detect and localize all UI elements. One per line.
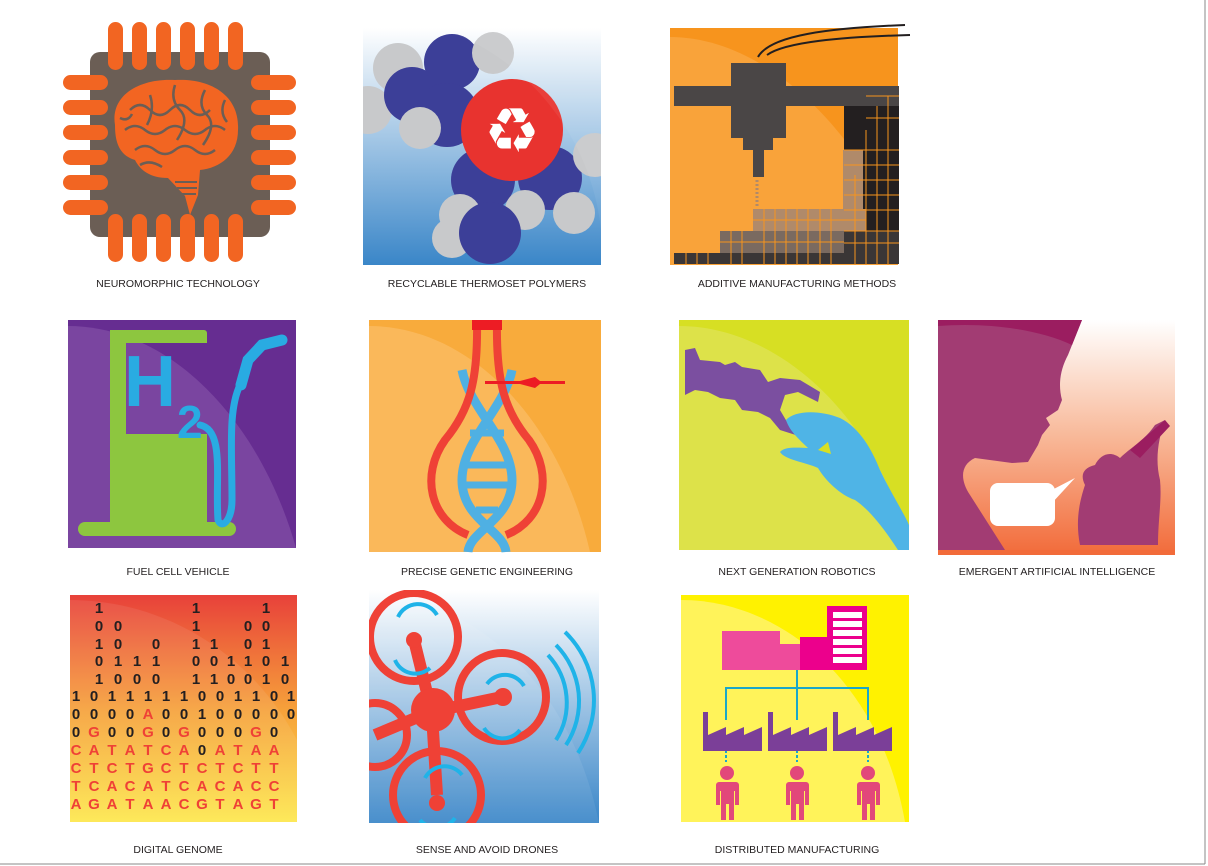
text grid: binary and DNA letters: 1 [133, 653, 141, 670]
icon: brain [114, 80, 238, 215]
label: precise genetic engineering: PRECISE GENETIC ENGINEERING [401, 566, 573, 578]
text grid: binary and DNA letters: 0 [244, 618, 252, 635]
panel: digital genome: G [250, 796, 262, 813]
text grid: binary and DNA letters: 1 [95, 636, 103, 653]
text grid: binary and DNA letters: 1 [144, 688, 152, 705]
text grid: binary and DNA letters: 0 [126, 706, 134, 723]
text grid: binary and DNA letters: G [142, 724, 154, 741]
text grid: binary and DNA letters: G [88, 724, 100, 741]
text grid: binary and DNA letters: 0 [244, 636, 252, 653]
text grid: binary and DNA letters: 1 [152, 653, 160, 670]
text grid: binary and DNA letters: 0 [133, 671, 141, 688]
text grid: binary and DNA letters: 0 [216, 688, 224, 705]
text grid: binary and DNA letters: 0 [216, 724, 224, 741]
text grid: binary and DNA letters: 0 [234, 706, 242, 723]
text grid: binary and DNA letters: 0 [287, 706, 295, 723]
text grid: binary and DNA letters: 1 [262, 636, 270, 653]
icon: recycle symbol [461, 79, 563, 181]
text grid: binary and DNA letters: 1 [114, 653, 122, 670]
text grid: binary and DNA letters: 0 [90, 688, 98, 705]
text grid: binary and DNA letters: 1 [95, 671, 103, 688]
label: neuromorphic technology: NEUROMORPHIC TECHNOLOGY [96, 278, 260, 290]
icon: headquarters [722, 606, 867, 670]
icon: red vessel [431, 322, 543, 535]
text grid: binary and DNA letters: 1 [262, 600, 270, 617]
text grid: binary and DNA letters: 1 [210, 671, 218, 688]
text grid: binary and DNA letters: 1 [192, 671, 200, 688]
panel: digital genome: 0 [198, 742, 206, 759]
text grid: binary and DNA letters: 1 [227, 653, 235, 670]
panel: digital genome: T [143, 742, 153, 759]
panel: digital genome: C [233, 760, 244, 777]
text grid: binary and DNA letters: 0 [162, 724, 170, 741]
text grid: binary and DNA letters: 0 [162, 706, 170, 723]
text grid: binary and DNA letters: G [178, 724, 190, 741]
text grid: binary and DNA letters: 1 [210, 636, 218, 653]
panel: distributed manufacturing [681, 595, 909, 822]
panel: digital genome: A [197, 778, 208, 795]
text grid: binary and DNA letters: 1 [287, 688, 295, 705]
icon: factories [703, 712, 892, 751]
panel: digital genome: A [179, 742, 190, 759]
panel: digital genome: T [125, 760, 135, 777]
icon: needle [485, 377, 565, 388]
panel: digital genome: A [233, 796, 244, 813]
panel: digital genome: C [125, 778, 136, 795]
text grid: binary and DNA letters: 0 [95, 653, 103, 670]
icon: DNA [462, 370, 512, 552]
label: distributed manufacturing: DISTRIBUTED MANUFACTURING [715, 844, 879, 856]
icon: recycle symbol: ♻ [484, 94, 540, 167]
text grid: binary and DNA letters: G [250, 724, 262, 741]
text grid: binary and DNA letters: 1 [262, 671, 270, 688]
text grid: binary and DNA letters: 1 [234, 688, 242, 705]
text grid: binary and DNA letters: 0 [95, 618, 103, 635]
icon: people [712, 766, 880, 820]
text grid: binary and DNA letters: A [143, 706, 154, 723]
icon: human hand [780, 412, 909, 550]
text grid: binary and DNA letters: 1 [95, 600, 103, 617]
text grid: binary and DNA letters: 0 [262, 618, 270, 635]
text grid: binary and DNA letters: 1 [72, 688, 80, 705]
text grid: binary and DNA letters: 0 [216, 706, 224, 723]
panel: digital genome: C [89, 778, 100, 795]
text grid: binary and DNA letters: 0 [90, 706, 98, 723]
text grid: binary and DNA letters: 0 [281, 671, 289, 688]
text grid: binary and DNA letters: 0 [108, 706, 116, 723]
icon: connection lines [726, 670, 868, 720]
panel: digital genome: A [71, 796, 82, 813]
label: recyclable thermoset polymers: RECYCLABLE THERMOSET POLYMERS [388, 278, 586, 290]
icon: H2: H [124, 342, 176, 422]
text grid: binary and DNA letters: 1 [281, 653, 289, 670]
panel: digital genome: C [71, 742, 82, 759]
text grid: binary and DNA letters: 0 [180, 706, 188, 723]
panel: digital genome: A [125, 742, 136, 759]
panel: digital genome: T [269, 760, 279, 777]
panel: digital genome: C [251, 778, 262, 795]
label: digital genome: DIGITAL GENOME [133, 844, 223, 856]
panel: digital genome: T [233, 742, 243, 759]
panel: precise genetic engineering [369, 320, 601, 552]
panel: digital genome: G [88, 796, 100, 813]
text grid: binary and DNA letters: 0 [72, 724, 80, 741]
text grid: binary and DNA letters: 0 [227, 671, 235, 688]
icon: robot arm [685, 348, 820, 437]
icon: chip body [90, 52, 270, 237]
panel: additive manufacturing methods [670, 25, 910, 265]
text grid: binary and DNA letters: 1 [126, 688, 134, 705]
panel: digital genome: A [161, 796, 172, 813]
text grid: binary and DNA letters: 0 [114, 618, 122, 635]
panel: digital genome: T [71, 778, 81, 795]
text grid: binary and DNA letters: 0 [270, 688, 278, 705]
panel: emergent artificial intelligence [938, 320, 1175, 555]
panel: digital genome: T [251, 760, 261, 777]
text grid: binary and DNA letters [72, 600, 295, 741]
panel: digital genome: C [269, 778, 280, 795]
text grid: binary and DNA letters: 1 [198, 706, 206, 723]
panel: digital genome: C [197, 760, 208, 777]
panel: recyclable thermoset polymers [363, 32, 601, 265]
text grid: binary and DNA letters: 0 [252, 706, 260, 723]
panel: digital genome: C [215, 778, 226, 795]
text grid: binary and DNA letters: 1 [244, 653, 252, 670]
panel: digital genome: T [215, 796, 225, 813]
panel: digital genome: C [179, 778, 190, 795]
text grid: binary and DNA letters: 0 [210, 653, 218, 670]
text grid: binary and DNA letters: 1 [108, 688, 116, 705]
icon: speech bubble [990, 478, 1075, 526]
text grid: binary and DNA letters: 1 [180, 688, 188, 705]
panel: digital genome: T [161, 778, 171, 795]
text grid: binary and DNA letters: 0 [270, 706, 278, 723]
text grid: binary and DNA letters: 0 [152, 636, 160, 653]
text grid: binary and DNA letters: 0 [114, 636, 122, 653]
panel: next generation robotics [679, 320, 909, 550]
text grid: binary and DNA letters: 0 [114, 671, 122, 688]
panel: digital genome [70, 595, 297, 822]
text grid: binary and DNA letters: 0 [72, 706, 80, 723]
panel: digital genome: C [71, 760, 82, 777]
panel: digital genome: A [215, 742, 226, 759]
icon: hand with pen [1078, 420, 1165, 545]
text grid: binary and DNA letters: 1 [252, 688, 260, 705]
panel: fuel cell vehicle: 2 [177, 396, 203, 448]
panel: digital genome: A [107, 796, 118, 813]
panel: digital genome: C [161, 760, 172, 777]
panel: digital genome: A [143, 796, 154, 813]
text grid: binary and DNA letters: 0 [262, 653, 270, 670]
icon: drone [369, 590, 550, 823]
text grid: binary and DNA letters: 0 [198, 724, 206, 741]
text grid: binary and DNA letters: 0 [152, 671, 160, 688]
text grid: binary and DNA letters: 0 [198, 688, 206, 705]
icon: propeller and signal arcs [395, 604, 594, 828]
panel: digital genome: T [215, 760, 225, 777]
panel: digital genome: T [269, 796, 279, 813]
text grid: binary and DNA letters: 0 [244, 671, 252, 688]
panel: neuromorphic technology [63, 22, 296, 262]
label: next generation robotics: NEXT GENERATION ROBOTICS [718, 566, 876, 578]
panel: digital genome: T [89, 760, 99, 777]
panel: digital genome: A [269, 742, 280, 759]
panel: digital genome: T [125, 796, 135, 813]
text grid: binary and DNA letters: 0 [192, 653, 200, 670]
panel: digital genome: A [107, 778, 118, 795]
panel: digital genome: T [107, 742, 117, 759]
panel: digital genome: C [179, 796, 190, 813]
panel: digital genome: A [143, 778, 154, 795]
label: emergent artificial intelligence: EMERGENT ARTIFICIAL INTELLIGENCE [959, 566, 1155, 578]
text grid: binary and DNA letters: 1 [192, 618, 200, 635]
panel: digital genome: G [142, 760, 154, 777]
icon: molecules [363, 32, 601, 264]
panel: digital genome: A [233, 778, 244, 795]
text grid: binary and DNA letters: 1 [192, 636, 200, 653]
icon: printer [674, 25, 910, 265]
icon: face silhouette [938, 320, 1082, 550]
label: fuel cell vehicle: FUEL CELL VEHICLE [126, 566, 230, 578]
label: additive manufacturing methods: ADDITIVE MANUFACTURING METHODS [698, 278, 896, 290]
panel: fuel cell vehicle [68, 320, 296, 548]
text grid: binary and DNA letters: 0 [270, 724, 278, 741]
panel: digital genome: T [179, 760, 189, 777]
panel: digital genome: G [196, 796, 208, 813]
panel: digital genome: C [107, 760, 118, 777]
icon: hose nozzle [200, 340, 282, 524]
label: sense and avoid drones: SENSE AND AVOID DRONES [416, 844, 558, 856]
panel: digital genome: A [251, 742, 262, 759]
panel: sense and avoid drones [369, 590, 599, 823]
text grid: binary and DNA letters: 0 [126, 724, 134, 741]
text grid: binary and DNA letters: 1 [162, 688, 170, 705]
panel: digital genome: C [161, 742, 172, 759]
panel: digital genome: A [89, 742, 100, 759]
text grid: binary and DNA letters: 0 [234, 724, 242, 741]
icon: pump [78, 330, 236, 536]
text grid: binary and DNA letters: 1 [192, 600, 200, 617]
text grid: binary and DNA letters: 0 [108, 724, 116, 741]
